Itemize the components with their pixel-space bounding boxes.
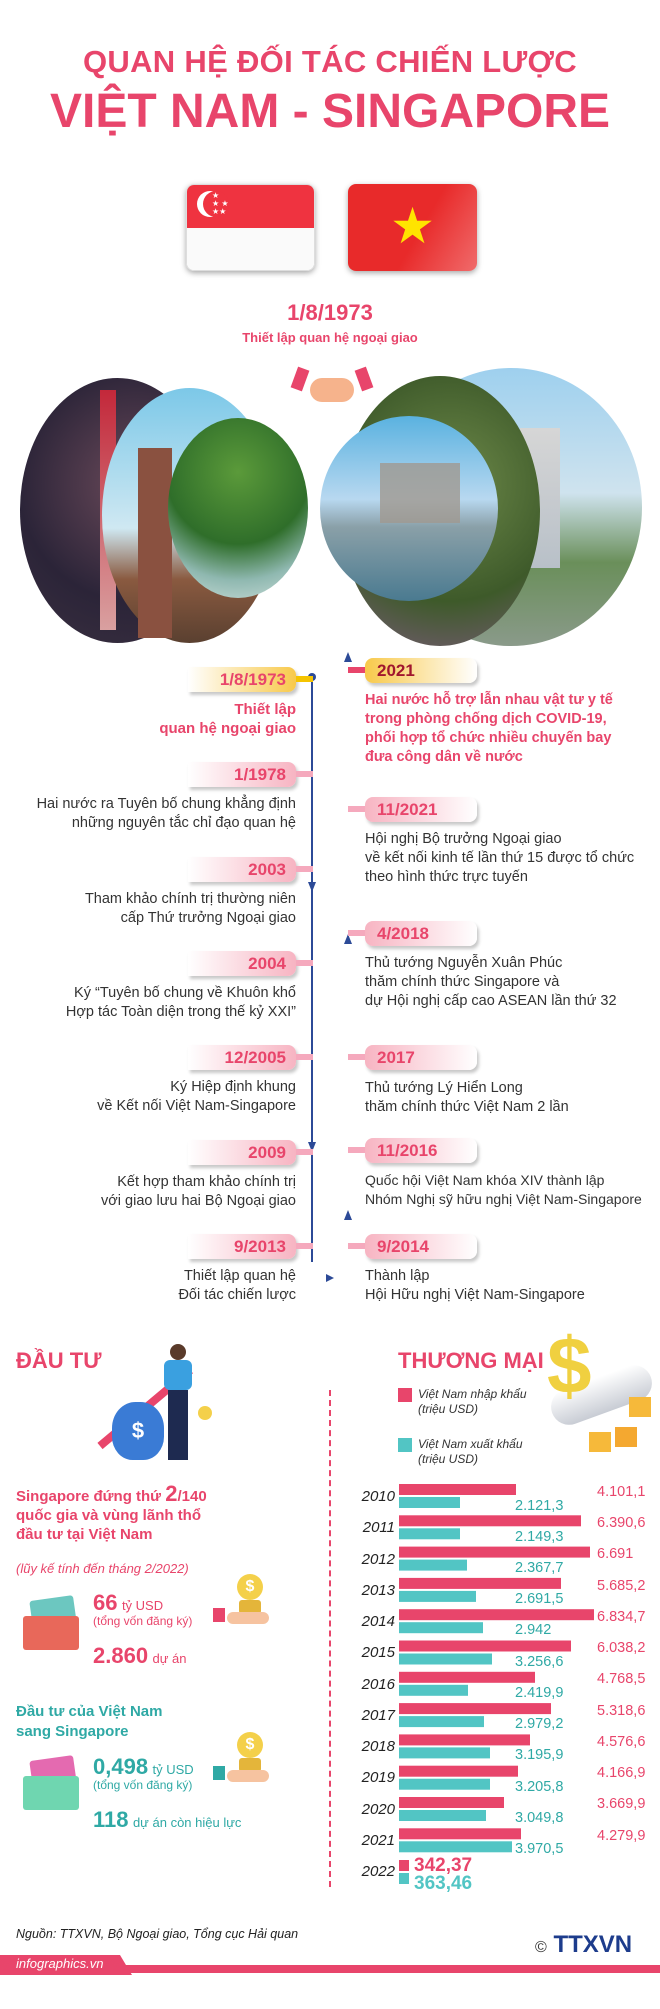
footer bar: infographics.vn <box>16 1956 103 1971</box>
legend: Việt Nam nhập khẩu <box>418 1387 527 1401</box>
stat: 66 billion USD <box>93 1590 192 1628</box>
source note: Nguồn: TTXVN, Bộ Ngoại giao, Tổng cục Hải quan <box>16 1927 298 1941</box>
icon: hand with coins <box>213 1574 269 1624</box>
text: Đối tác chiến lược <box>178 1287 296 1303</box>
text: Hợp tác Toàn diện trong thế kỷ XXI” <box>66 1004 296 1020</box>
icon: investor illustration <box>98 1344 212 1460</box>
bar chart: trade: 3.205,8 <box>515 1779 563 1795</box>
text: Singapore rank: Singapore đứng thứ 2/140 <box>16 1481 207 1506</box>
text: Hội nghị Bộ trưởng Ngoại giao <box>365 831 562 847</box>
text: Vietnam investment in Singapore: sang Singapore <box>16 1723 129 1740</box>
bar chart: trade: 2014 <box>361 1613 395 1630</box>
text: trong phòng chống dịch COVID-19, <box>365 711 607 727</box>
text: Hai nước hỗ trợ lẫn nhau vật tư y tế <box>365 692 613 708</box>
timeline: 9/2014 <box>348 1234 585 1303</box>
footer bar <box>0 1955 660 1975</box>
icon: hand with coins 2 <box>213 1732 269 1782</box>
stat: 0.498 billion USD: (tổng vốn đăng ký) <box>93 1778 192 1792</box>
bar chart: trade: 6.390,6 <box>597 1515 645 1531</box>
text: về Kết nối Việt Nam-Singapore <box>97 1098 296 1114</box>
legend <box>398 1387 527 1466</box>
text: Thiết lập quan hệ <box>184 1268 296 1284</box>
icon: red folder <box>23 1596 79 1650</box>
title: VIỆT NAM - SINGAPORE <box>50 85 610 138</box>
bar chart: trade: 4.279,9 <box>597 1828 645 1844</box>
bar chart: trade: 2.942 <box>515 1622 551 1638</box>
timeline: 2021 <box>348 658 613 765</box>
flag: Vietnam <box>348 184 477 271</box>
bar chart: trade: 3.049,8 <box>515 1810 563 1826</box>
bar chart: trade: 2.367,7 <box>515 1560 563 1576</box>
text: 2003 <box>248 860 286 879</box>
icon: hand with coins 2: $ <box>246 1736 254 1753</box>
bar chart: trade: 5.685,2 <box>597 1578 645 1594</box>
stat: 0.498 billion USD: 0,498 tỷ USD <box>93 1754 194 1779</box>
text: 12/2005 <box>225 1048 286 1067</box>
bar chart: trade: 363,46 <box>414 1873 472 1894</box>
timeline line <box>308 652 352 1282</box>
timeline: 11/2016 <box>348 1138 642 1207</box>
legend: Việt Nam xuất khẩu <box>418 1437 523 1451</box>
bar chart: trade: 3.195,9 <box>515 1747 563 1763</box>
bar chart: trade: 2010 <box>361 1488 396 1505</box>
bar chart: trade: 2011 <box>362 1519 395 1536</box>
photos: Singapore landmarks <box>320 368 642 646</box>
text: 9/2013 <box>234 1237 286 1256</box>
bar chart: trade: 2019 <box>361 1769 396 1786</box>
text: Thủ tướng Lý Hiển Long <box>365 1080 523 1096</box>
bar chart: trade <box>361 1484 645 1894</box>
bar chart: trade: 3.256,6 <box>515 1654 563 1670</box>
text: về kết nối kinh tế lần thứ 15 được tổ chức <box>365 850 634 866</box>
date: establishment <box>242 300 418 345</box>
heading: trade: THƯƠNG MẠI <box>398 1348 544 1373</box>
flag: Singapore: ★★ <box>212 207 226 216</box>
text: Thủ tướng Nguyễn Xuân Phúc <box>365 955 562 971</box>
icon: investor illustration: $ <box>132 1418 144 1443</box>
icon: handshake <box>290 366 374 402</box>
heading: investment: ĐẦU TƯ <box>16 1348 101 1373</box>
icon: dollar plane: $ <box>547 1321 592 1410</box>
text: những nguyên tắc chỉ đạo quan hệ <box>72 815 296 831</box>
text: Kết hợp tham khảo chính trị <box>117 1174 296 1190</box>
text: Ký “Tuyên bố chung về Khuôn khổ <box>74 985 296 1001</box>
timeline: 2003 <box>85 857 313 926</box>
text: 11/2021 <box>377 800 438 819</box>
text: Thành lập <box>365 1268 430 1284</box>
text: thăm chính thức Việt Nam 2 lần <box>365 1099 569 1115</box>
text: (triệu USD) <box>418 1452 478 1466</box>
timeline: 2009 <box>101 1140 313 1209</box>
bar chart: trade: 4.576,6 <box>597 1734 645 1750</box>
bar chart: trade: 2013 <box>361 1582 396 1599</box>
photos: Vietnam landmarks <box>20 378 308 643</box>
title: QUAN HỆ ĐỐI TÁC CHIẾN LƯỢC <box>83 44 577 79</box>
text: Hai nước ra Tuyên bố chung khẳng định <box>37 796 296 812</box>
date: establishment: Thiết lập quan hệ ngoại giao <box>242 330 418 345</box>
text: phối hợp tổ chức nhiều chuyến bay <box>365 730 611 746</box>
stat: 118 projects: 118 dự án còn hiệu lực <box>93 1807 241 1832</box>
text: 1/1978 <box>234 765 286 784</box>
bar chart: trade: 6.834,7 <box>597 1609 645 1625</box>
bar chart: trade: 2020 <box>361 1801 396 1818</box>
icon: hand with coins: $ <box>246 1578 254 1595</box>
text: Ký Hiệp định khung <box>170 1079 296 1095</box>
bar chart: trade: 4.166,9 <box>597 1765 645 1781</box>
text: quan hệ ngoại giao <box>159 720 296 737</box>
bar chart: trade: 2.979,2 <box>515 1716 563 1732</box>
stat: 66 billion USD: (tổng vốn đăng ký) <box>93 1614 192 1628</box>
text: cumulative note: (lũy kế tính đến tháng 2/2022) <box>16 1561 189 1576</box>
text: 2021 <box>377 661 415 680</box>
bar chart: trade: 2017 <box>361 1707 396 1724</box>
flag: Vietnam: ★ <box>390 198 435 254</box>
text: Quốc hội Việt Nam khóa XIV thành lập <box>365 1172 604 1188</box>
bar chart: trade: 4.101,1 <box>597 1484 645 1500</box>
text: đưa công dân về nước <box>365 749 523 765</box>
bar chart: trade: 2.691,5 <box>515 1591 563 1607</box>
text: Tham khảo chính trị thường niên <box>85 891 296 907</box>
timeline: 4/2018 <box>348 921 617 1009</box>
text: với giao lưu hai Bộ Ngoại giao <box>101 1193 296 1209</box>
flag: Singapore <box>186 184 315 271</box>
bar chart: trade: 6.038,2 <box>597 1640 645 1656</box>
text: theo hình thức trực tuyến <box>365 869 528 885</box>
text: Vietnam investment in Singapore <box>16 1703 162 1740</box>
text: 2004 <box>248 954 286 973</box>
bar chart: trade: 2015 <box>361 1644 396 1661</box>
bar chart: trade: 6.691 <box>597 1546 633 1562</box>
timeline: 1/1978 <box>37 762 313 831</box>
flag: Singapore: ★ ★ <box>212 199 229 208</box>
bar chart: trade: 342,37 <box>414 1855 472 1876</box>
legend: (triệu USD) <box>418 1402 478 1416</box>
text: Singapore rank: quốc gia và vùng lãnh thổ <box>16 1507 201 1524</box>
bar chart: trade: 2.419,9 <box>515 1685 563 1701</box>
bar chart: trade: 2021 <box>361 1832 395 1849</box>
flag: Singapore: ★ <box>212 191 219 200</box>
bar chart: trade: 2.149,3 <box>515 1529 563 1545</box>
text: Hội Hữu nghị Việt Nam-Singapore <box>365 1287 585 1303</box>
stat: 0.498 billion USD <box>93 1754 194 1792</box>
timeline: 1/8/1973 <box>159 667 313 737</box>
divider <box>329 1390 331 1887</box>
text: 2017 <box>377 1048 415 1067</box>
bar chart: trade: 3.669,9 <box>597 1796 645 1812</box>
stat: 66 billion USD: 66 tỷ USD <box>93 1590 163 1615</box>
bar chart: trade: 2018 <box>361 1738 396 1755</box>
timeline: 9/2013 <box>178 1234 313 1303</box>
text: Vietnam investment in Singapore: Đầu tư của Việt Nam <box>16 1703 162 1720</box>
bar chart: trade: 2.121,3 <box>515 1498 563 1514</box>
timeline: 11/2021 <box>348 797 634 885</box>
bar chart: trade: 2022 <box>361 1863 396 1880</box>
text: dự Hội nghị cấp cao ASEAN lần thứ 32 <box>365 993 617 1009</box>
date: establishment: 1/8/1973 <box>287 300 373 325</box>
timeline: 12/2005 <box>97 1045 313 1114</box>
title <box>50 44 610 138</box>
timeline: 2017 <box>348 1045 569 1115</box>
text: 1/8/1973 <box>220 670 286 689</box>
text: Nhóm Nghị sỹ hữu nghị Việt Nam-Singapore <box>365 1191 642 1207</box>
text: 9/2014 <box>377 1237 429 1256</box>
text: cấp Thứ trưởng Ngoại giao <box>121 910 296 926</box>
text: Singapore rank <box>16 1481 207 1543</box>
text: thăm chính thức Singapore và <box>365 974 559 990</box>
text: 2009 <box>248 1143 286 1162</box>
timeline: 2004 <box>66 951 313 1020</box>
text: 11/2016 <box>377 1141 438 1160</box>
bar chart: trade: 4.768,5 <box>597 1671 645 1687</box>
icon: teal folder <box>23 1756 79 1810</box>
bar chart: trade: 3.970,5 <box>515 1841 563 1857</box>
logo: TTXVN: © TTXVN <box>535 1931 632 1958</box>
bar chart: trade: 5.318,6 <box>597 1703 645 1719</box>
text: Singapore rank: đầu tư tại Việt Nam <box>16 1526 152 1543</box>
text: 4/2018 <box>377 924 429 943</box>
bar chart: trade: 2012 <box>361 1551 396 1568</box>
icon: dollar plane <box>547 1321 652 1452</box>
text: Thiết lập <box>234 701 296 718</box>
stat: 2860 projects: 2.860 dự án <box>93 1643 187 1668</box>
bar chart: trade: 2016 <box>361 1676 396 1693</box>
